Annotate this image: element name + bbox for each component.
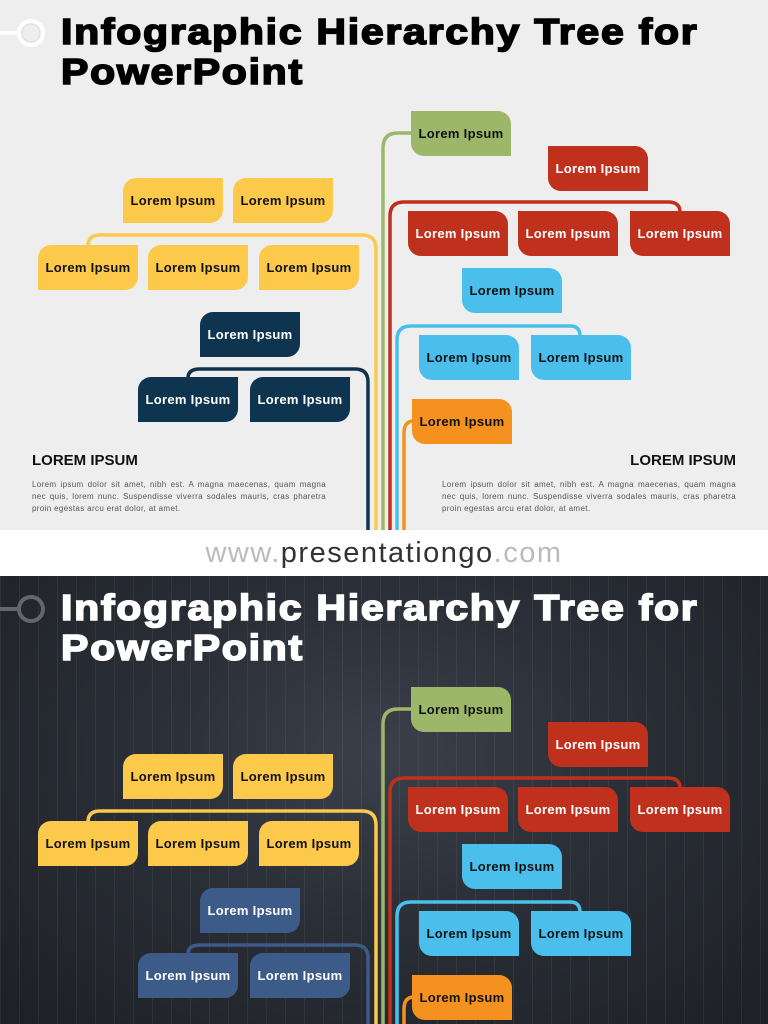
panel: light version: Lorem Ipsum — [427, 350, 511, 365]
panel: light version: LOREM IPSUM — [630, 452, 736, 469]
panel: light version: Lorem Ipsum — [46, 260, 130, 275]
panel: light version: Lorem ipsum dolor sit amet, nibh est. A magna maecenas, quam magna nec quis, lorem nunc. Suspendisse viverra sodales mauris, cras pharetra proin egestas arcu erat dolor, at amet. — [32, 480, 326, 513]
green box: Lorem Ipsum — [419, 126, 503, 141]
panel: dark version: Lorem Ipsum — [156, 836, 240, 851]
panel: dark version: Lorem Ipsum — [427, 926, 511, 941]
text block: right — [442, 452, 736, 513]
navy branch boxes — [138, 888, 350, 998]
panel: dark version: Lorem Ipsum — [416, 802, 500, 817]
orange box — [412, 399, 512, 444]
title: PowerPoint — [61, 627, 304, 668]
orange box — [412, 975, 512, 1020]
orange box: Lorem Ipsum — [420, 414, 504, 429]
website footer: www.presentationgo.com — [205, 537, 562, 569]
panel: dark version: Lorem Ipsum — [470, 859, 554, 874]
title: Infographic Hierarchy Tree for — [61, 587, 698, 628]
panel: dark version — [0, 576, 768, 1024]
panel: light version: Lorem Ipsum — [556, 161, 640, 176]
title — [61, 11, 698, 92]
green box — [411, 687, 511, 732]
green box: Lorem Ipsum — [419, 702, 503, 717]
panel: light version — [0, 0, 768, 530]
panel: light version: Lorem Ipsum — [267, 260, 351, 275]
tree connector lines — [86, 707, 682, 1024]
navy branch boxes — [138, 312, 350, 422]
panel: dark version: Lorem Ipsum — [208, 903, 292, 918]
panel: light version: Lorem Ipsum — [208, 327, 292, 342]
blue branch boxes — [419, 844, 631, 956]
panel: light version: Lorem Ipsum — [539, 350, 623, 365]
panel: light version: Lorem Ipsum — [156, 260, 240, 275]
panel: dark version: Lorem Ipsum — [526, 802, 610, 817]
yellow branch boxes — [38, 754, 359, 866]
red branch boxes — [408, 146, 730, 256]
panel: light version: Lorem Ipsum — [241, 193, 325, 208]
panel: light version: Lorem Ipsum — [416, 226, 500, 241]
panel: dark version: Lorem Ipsum — [146, 968, 230, 983]
text block: left — [32, 452, 326, 513]
yellow branch boxes — [38, 178, 359, 290]
green box — [411, 111, 511, 156]
title — [61, 587, 698, 668]
icon: circle connector — [0, 19, 45, 47]
panel: light version: Lorem Ipsum — [526, 226, 610, 241]
panel: dark version: Lorem Ipsum — [46, 836, 130, 851]
icon: circle connector — [0, 595, 45, 623]
panel: dark version: Lorem Ipsum — [638, 802, 722, 817]
panel: light version: Lorem Ipsum — [638, 226, 722, 241]
panel: light version: Lorem Ipsum — [470, 283, 554, 298]
panel: light version: Lorem Ipsum — [131, 193, 215, 208]
red branch boxes — [408, 722, 730, 832]
title: PowerPoint — [61, 51, 304, 92]
panel: dark version: Lorem Ipsum — [131, 769, 215, 784]
panel: dark version: Lorem Ipsum — [241, 769, 325, 784]
tree connector lines — [86, 131, 682, 530]
panel: light version: Lorem ipsum dolor sit amet, nibh est. A magna maecenas, quam magna nec quis, lorem nunc. Suspendisse viverra sodales mauris, cras pharetra proin egestas arcu erat dolor, at amet. — [442, 480, 736, 513]
panel: dark version: Lorem Ipsum — [258, 968, 342, 983]
panel: light version: Lorem Ipsum — [258, 392, 342, 407]
panel: dark version: Lorem Ipsum — [539, 926, 623, 941]
blue branch boxes — [419, 268, 631, 380]
panel: light version: LOREM IPSUM — [32, 452, 138, 469]
orange box: Lorem Ipsum — [420, 990, 504, 1005]
panel: light version: Lorem Ipsum — [146, 392, 230, 407]
panel: dark version: Lorem Ipsum — [267, 836, 351, 851]
panel: dark version: Lorem Ipsum — [556, 737, 640, 752]
title: Infographic Hierarchy Tree for — [61, 11, 698, 52]
